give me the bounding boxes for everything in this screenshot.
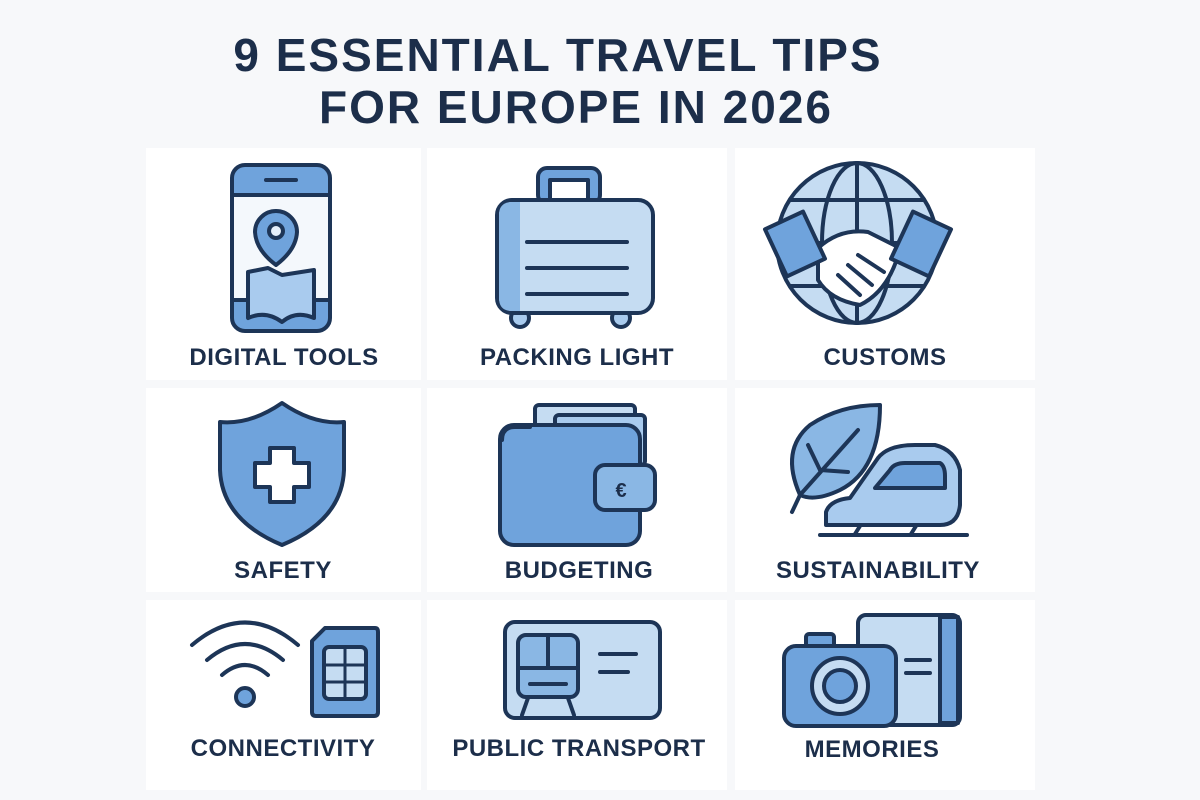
- icon: smartphone with map: [232, 165, 330, 331]
- title: [233, 29, 883, 133]
- label: connectivity: CONNECTIVITY: [191, 735, 375, 762]
- label: packing light: PACKING LIGHT: [480, 344, 674, 371]
- icon: wifi and sim: [192, 622, 378, 716]
- icon: globe handshake: [765, 163, 951, 323]
- icon: suitcase: [497, 168, 653, 327]
- panel: connectivity: [146, 600, 421, 790]
- label: digital tools: DIGITAL TOOLS: [189, 344, 379, 371]
- icon: camera and journal: [784, 615, 960, 726]
- panel: customs: [735, 148, 1035, 380]
- panel: digital tools: [146, 148, 421, 380]
- panel: budgeting: [427, 388, 727, 592]
- label: safety: SAFETY: [234, 557, 332, 584]
- icon: leaf and train: [792, 405, 967, 535]
- panel: packing light: [427, 148, 727, 380]
- label: sustainability: SUSTAINABILITY: [776, 557, 980, 584]
- panel: memories: [735, 600, 1035, 790]
- label: public transport: PUBLIC TRANSPORT: [452, 735, 706, 762]
- label: budgeting: BUDGETING: [505, 557, 653, 584]
- panel: safety: [146, 388, 421, 592]
- label: memories: MEMORIES: [805, 736, 939, 763]
- panel: sustainability: [735, 388, 1035, 592]
- icon: shield: [220, 403, 344, 545]
- title: FOR EUROPE IN 2026: [319, 81, 833, 133]
- title: 9 ESSENTIAL TRAVEL TIPS: [233, 29, 883, 81]
- icon: wallet: [500, 405, 655, 545]
- label: customs: CUSTOMS: [823, 344, 947, 371]
- icon: transit card: [505, 622, 660, 718]
- icon: wallet: €: [615, 480, 627, 502]
- panel: public transport: [427, 600, 727, 790]
